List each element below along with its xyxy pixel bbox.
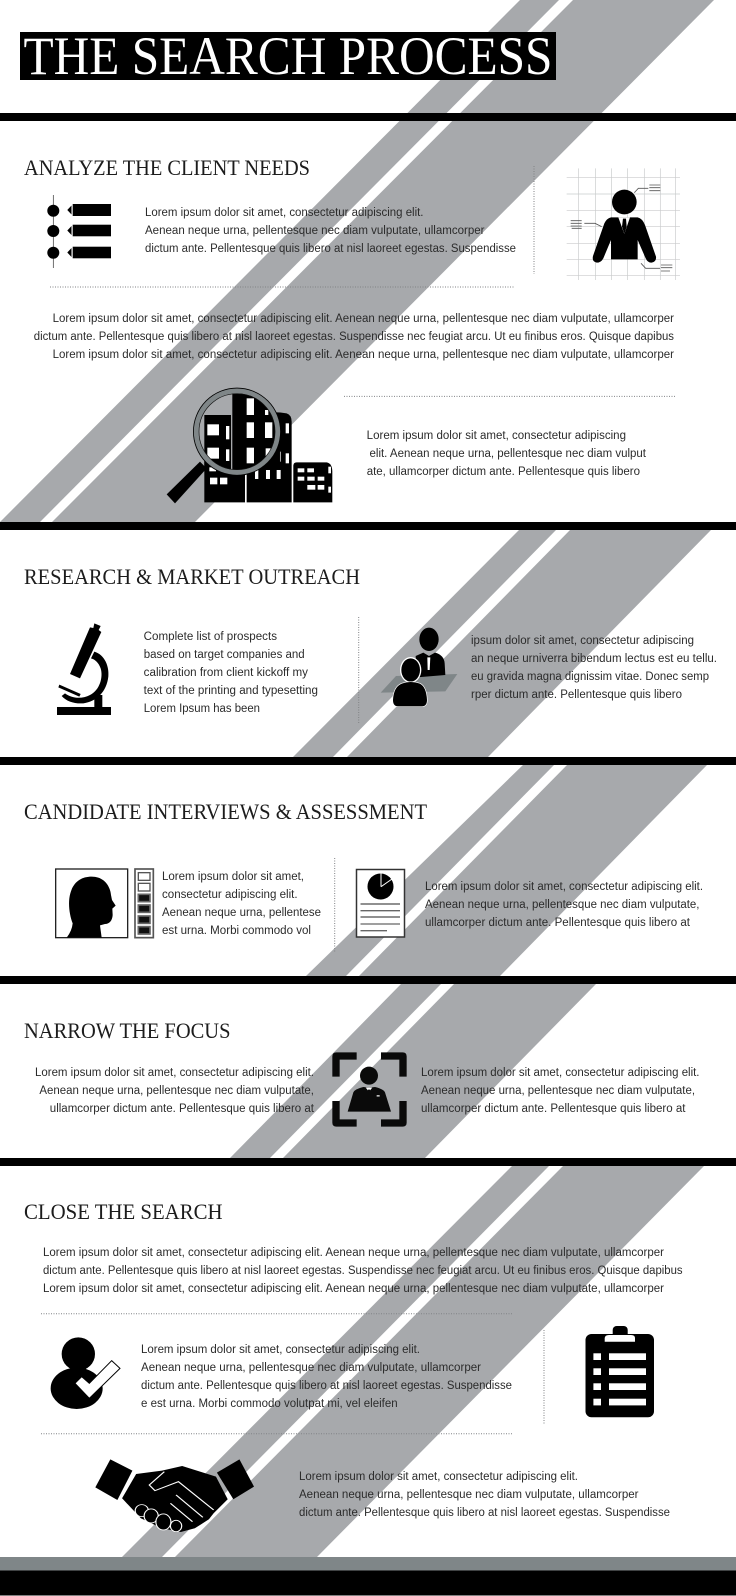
heading: analyze: ANALYZE THE CLIENT NEEDS (24, 155, 310, 180)
icon: magnifier over buildings (167, 389, 332, 503)
icon: handshake (95, 1459, 254, 1532)
icon: person with check mark (51, 1337, 120, 1409)
text block: ipsum right: eu gravida magna dignissim vitae. Donec semp (471, 671, 709, 683)
text block: narrow left: ullamcorper dictum ante. Pellentesque quis libero at (50, 1103, 315, 1115)
icon: focus frame with businessman (332, 1052, 407, 1127)
text block: close paragraph: Lorem ipsum dolor sit amet, consectetur adipiscing elit. Aenean neque urna, pellentesque nec diam vulputate, ullamcorper (43, 1283, 664, 1295)
title: THE SEARCH PROCESS (24, 26, 552, 86)
section rule 2 (0, 522, 736, 530)
text block: ipsum right (471, 635, 717, 701)
text block: narrow right (421, 1067, 700, 1115)
text block: buildings: ate, ullamcorper dictum ante. Pellentesque quis libero (367, 466, 640, 478)
text block: close paragraph: dictum ante. Pellentesque quis libero at nisl laoreet egestas. Suspendisse nec feugiat arcu. Ut eu finibus eros. Quisque dapibus (43, 1265, 683, 1277)
text block: narrow left: Lorem ipsum dolor sit amet, consectetur adipiscing elit. (35, 1067, 314, 1079)
text block: interviews left (162, 871, 321, 937)
text block: prospects (144, 631, 318, 715)
diagonal bands: close section (122, 1166, 704, 1557)
text block: narrow left (35, 1067, 315, 1115)
text block: ipsum right: rper dictum ante. Pellentesque quis libero (471, 689, 682, 701)
text block: narrow right: ullamcorper dictum ante. Pellentesque quis libero at (421, 1103, 686, 1115)
section rule 4 (0, 976, 736, 984)
text block: interviews right (425, 881, 703, 929)
text block: prospects: Lorem Ipsum has been (144, 703, 260, 715)
footer bar (0, 1557, 736, 1596)
icon: businessman on grid (567, 168, 680, 280)
text block: analyze paragraph: Lorem ipsum dolor sit amet, consectetur adipiscing elit. Aenean neque urna, pellentesque nec diam vulputate, ullamcorper (53, 349, 674, 361)
heading: interviews: CANDIDATE INTERVIEWS & ASSESSMENT (24, 799, 427, 824)
icon: head profile with meter (56, 869, 153, 938)
text block: close bottom: dictum ante. Pellentesque quis libero at nisl laoreet egestas. Suspendisse (299, 1507, 670, 1519)
section rule 3 (0, 757, 736, 765)
text block: interviews left: Aenean neque urna, pellentese (162, 907, 321, 919)
section rule 5 (0, 1158, 736, 1166)
text block: interviews right: Lorem ipsum dolor sit amet, consectetur adipiscing elit. (425, 881, 703, 893)
text block: close paragraph (43, 1247, 683, 1295)
text block: narrow left: Aenean neque urna, pellentesque nec diam vulputate, (39, 1085, 314, 1097)
text block: prospects: based on target companies and (144, 649, 305, 661)
text block: close bottom (299, 1471, 670, 1519)
text block: analyze paragraph (34, 313, 674, 361)
panel: narrow the focus (24, 1018, 700, 1127)
text block: analyze paragraph: Lorem ipsum dolor sit amet, consectetur adipiscing elit. Aenean neque urna, pellentesque nec diam vulputate, ullamcorper (53, 313, 674, 325)
diagonal bands: header and analyze section (0, 0, 714, 522)
heading: research: RESEARCH & MARKET OUTREACH (24, 564, 360, 589)
icon: report document (356, 870, 404, 937)
diagonal bands: narrow section (230, 984, 596, 1158)
text block: buildings: Lorem ipsum dolor sit amet, consectetur adipiscing (367, 430, 626, 442)
text block: interviews right: ullamcorper dictum ante. Pellentesque quis libero at (425, 917, 691, 929)
text block: analyze intro: Lorem ipsum dolor sit amet, consectetur adipiscing elit. (145, 207, 424, 219)
text block: buildings: elit. Aenean neque urna, pellentesque nec diam vulput (370, 448, 647, 460)
text block: close middle: Lorem ipsum dolor sit amet, consectetur adipiscing elit. (141, 1344, 420, 1356)
text block: interviews right: Aenean neque urna, pellentesque nec diam vulputate, (425, 899, 700, 911)
icon: checklist tags (47, 195, 111, 268)
text block: narrow right: Aenean neque urna, pellentesque nec diam vulputate, (421, 1085, 695, 1097)
text block: interviews left: Lorem ipsum dolor sit amet, (162, 871, 304, 883)
text block: close bottom: Aenean neque urna, pellentesque nec diam vulputate, ullamcorper (299, 1489, 639, 1501)
diagonal bands: interviews section (306, 764, 708, 976)
heading: close: CLOSE THE SEARCH (24, 1199, 222, 1224)
text block: close middle: Aenean neque urna, pellentesque nec diam vulputate, ullamcorper (141, 1362, 481, 1374)
text block: ipsum right: an neque urniverra bibendum lectus est eu tellu. (471, 653, 717, 665)
text block: interviews left: consectetur adipiscing elit. (162, 889, 298, 901)
text block: close paragraph: Lorem ipsum dolor sit amet, consectetur adipiscing elit. Aenean neque urna, pellentesque nec diam vulputate, ullamcorper (43, 1247, 664, 1259)
text block: analyze intro: dictum ante. Pellentesque quis libero at nisl laoreet egestas. Suspendisse (145, 243, 516, 255)
icon: microscope (57, 623, 111, 715)
text block: buildings (367, 430, 647, 478)
text block: prospects: calibration from client kickoff my (144, 667, 308, 679)
text block: narrow right: Lorem ipsum dolor sit amet, consectetur adipiscing elit. (421, 1067, 700, 1079)
text block: analyze intro: Aenean neque urna, pellentesque nec diam vulputate, ullamcorper (145, 225, 485, 237)
diagonal bands: research section (293, 530, 711, 757)
panel: research and market outreach (24, 564, 717, 723)
panel: close the search (24, 1199, 683, 1532)
icon: interview people (381, 628, 457, 707)
section rule 1 (0, 113, 736, 121)
text block: close bottom: Lorem ipsum dolor sit amet, consectetur adipiscing elit. (299, 1471, 578, 1483)
icon: clipboard (586, 1326, 654, 1417)
text block: close middle: e est urna. Morbi commodo volutpat mi, vel eleifen (141, 1398, 398, 1410)
text block: prospects: Complete list of prospects (144, 631, 277, 643)
text block: close middle: dictum ante. Pellentesque quis libero at nisl laoreet egestas. Suspendisse (141, 1380, 512, 1392)
text block: analyze paragraph: dictum ante. Pellentesque quis libero at nisl laoreet egestas. Suspendisse nec feugiat arcu. Ut eu finibus eros. Quisque dapibus (34, 331, 674, 343)
text block: close middle (141, 1344, 512, 1410)
text block: interviews left: est urna. Morbi commodo vol (162, 925, 311, 937)
panel: candidate interviews and assessment (24, 799, 703, 952)
text block: analyze intro (145, 207, 516, 255)
text block: prospects: text of the printing and typesetting (144, 685, 318, 697)
text block: ipsum right: ipsum dolor sit amet, consectetur adipiscing (471, 635, 694, 647)
heading: narrow: NARROW THE FOCUS (24, 1018, 230, 1043)
panel: analyze the client needs (24, 155, 680, 503)
